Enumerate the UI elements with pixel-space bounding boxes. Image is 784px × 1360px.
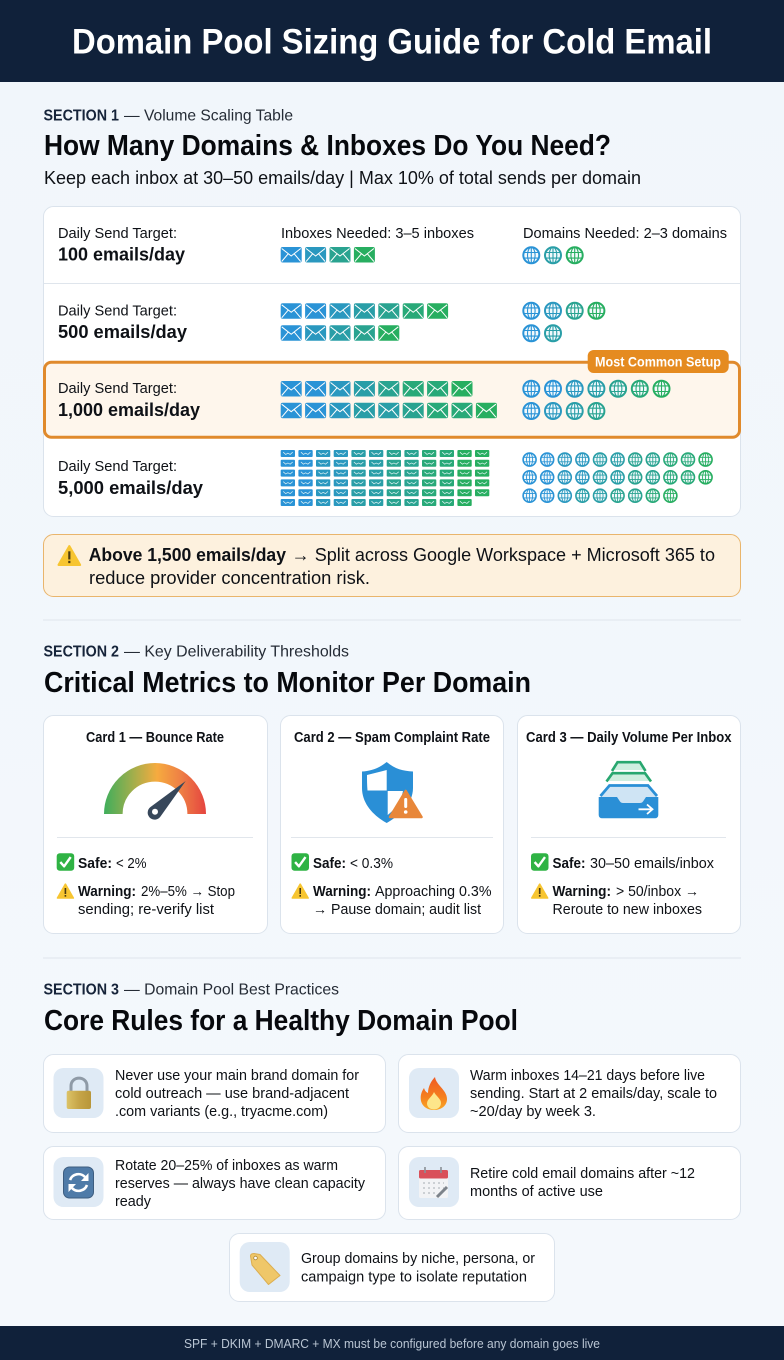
section 1 heading: How Many Domains & Inboxes Do You Need? — [44, 130, 611, 162]
section 1 heading: — Volume Scaling Table — [124, 108, 293, 124]
icon: tag — [250, 1254, 280, 1284]
panel: rule retire domains: Retire cold email domains after ~12 — [470, 1166, 695, 1182]
row: 500 emails/day: Daily Send Target: — [58, 304, 177, 320]
section 2 heading — [44, 644, 531, 699]
safe threshold: Safe: — [313, 856, 346, 872]
panel: rule retire domains: months of active use — [470, 1184, 603, 1200]
warning threshold: → Pause domain; audit list — [313, 902, 481, 918]
panel: rule warm inboxes: ~20/day by week 3. — [470, 1104, 596, 1120]
panel: rule rotate inboxes — [44, 1146, 386, 1220]
section 1 heading: SECTION 1 — [44, 108, 119, 124]
panel: rule rotate inboxes: reserves — always have clean capacity — [115, 1176, 366, 1192]
row: 5,000 emails/day: 5,000 emails/day — [58, 478, 203, 498]
panel: card 2 spam complaint rate: Card 2 — Spam Complaint Rate — [294, 730, 490, 746]
panel: card 1 bounce rate: Card 1 — Bounce Rate — [86, 730, 224, 746]
row: 1,000 emails/day highlighted: Daily Send Target: — [58, 381, 177, 397]
warning threshold: 2%–5% → Stop — [141, 884, 235, 900]
callout: split providers above 1,500 emails/day — [44, 534, 740, 596]
row: 5,000 emails/day — [58, 450, 712, 506]
icon: lock — [67, 1078, 91, 1109]
row: 100 emails/day: Inboxes Needed: 3–5 inboxes — [281, 226, 474, 242]
panel: rule main brand domain: .com variants (e.g., tryacme.com) — [115, 1104, 328, 1120]
row: 5,000 emails/day: Daily Send Target: — [58, 459, 177, 475]
section 1 heading: Keep each inbox at 30–50 emails/day | Max 10% of total sends per domain — [44, 168, 641, 188]
safe threshold — [292, 853, 393, 872]
panel: rule group domains — [230, 1234, 554, 1302]
warning threshold: Approaching 0.3% — [375, 884, 492, 900]
section 3 heading — [44, 982, 518, 1037]
icon: refresh — [64, 1167, 94, 1198]
section 3 heading: — Domain Pool Best Practices — [124, 982, 339, 998]
panel: rule warm inboxes: Warm inboxes 14–21 days before live — [470, 1068, 705, 1084]
panel: rule warm inboxes: sending. Start at 2 emails/day, scale to — [470, 1086, 717, 1102]
safe threshold: < 0.3% — [350, 856, 393, 872]
footer — [0, 1326, 784, 1360]
row: 500 emails/day — [58, 303, 604, 342]
warning threshold — [532, 884, 702, 918]
safe threshold: < 2% — [116, 856, 147, 872]
icon: calendar — [419, 1167, 448, 1198]
icon: shield with warning — [362, 762, 422, 823]
panel: rule rotate inboxes: ready — [115, 1194, 152, 1210]
panel: rule rotate inboxes: Rotate 20–25% of inboxes as warm — [115, 1158, 338, 1174]
warning threshold: sending; re-verify list — [78, 902, 214, 918]
row: 100 emails/day: 100 emails/day — [58, 244, 185, 264]
badge: most common setup: Most Common Setup — [595, 354, 721, 370]
warning threshold: Warning: — [313, 884, 371, 900]
icon: inbox tray stack — [599, 761, 658, 818]
callout: split providers above 1,500 emails/day: reduce provider concentration risk. — [89, 568, 370, 588]
warning threshold: > 50/inbox → — [616, 884, 699, 900]
warning threshold: Warning: — [78, 884, 136, 900]
warning threshold — [292, 884, 492, 918]
safe threshold — [57, 853, 147, 872]
safe threshold: Safe: — [78, 856, 112, 872]
row: 1,000 emails/day highlighted: 1,000 emails/day — [58, 400, 200, 420]
warning threshold — [58, 884, 235, 918]
safe threshold — [531, 853, 715, 872]
title: Domain Pool Sizing Guide for Cold Email — [72, 22, 712, 62]
panel: volume scaling table — [44, 206, 740, 516]
section 1 heading — [44, 108, 641, 188]
row: 100 emails/day: Domains Needed: 2–3 domains — [523, 226, 727, 242]
footer: SPF + DKIM + DMARC + MX must be configured before any domain goes live — [184, 1337, 600, 1351]
badge: most common setup — [588, 350, 729, 373]
row: 100 emails/day: Daily Send Target: — [58, 226, 177, 242]
panel: rule main brand domain: cold outreach — use brand-adjacent — [115, 1086, 349, 1102]
callout: split providers above 1,500 emails/day: → Split across Google Workspace + Microsoft 365 to — [292, 545, 715, 565]
row: 100 emails/day — [58, 226, 727, 264]
panel: card 3 daily volume per inbox — [518, 716, 740, 934]
panel: card 2 spam complaint rate — [280, 716, 504, 934]
panel: rule group domains: campaign type to isolate reputation — [301, 1270, 527, 1286]
row: 1,000 emails/day highlighted — [44, 350, 740, 437]
safe threshold: 30–50 emails/inbox — [590, 856, 715, 872]
warning threshold: Reroute to new inboxes — [552, 902, 702, 918]
panel: card 3 daily volume per inbox: Card 3 — Daily Volume Per Inbox — [526, 730, 732, 746]
panel: rule warm inboxes — [398, 1054, 740, 1132]
icon: warning — [59, 546, 80, 565]
safe threshold: Safe: — [552, 856, 586, 872]
panel: rule group domains: Group domains by niche, persona, or — [301, 1251, 535, 1267]
panel: rule main brand domain — [44, 1054, 386, 1132]
section 3 heading: SECTION 3 — [44, 982, 119, 998]
panel: rule retire domains — [398, 1146, 740, 1220]
panel: card 1 bounce rate — [44, 716, 268, 934]
section 3 heading: Core Rules for a Healthy Domain Pool — [44, 1005, 518, 1037]
icon: fire — [421, 1077, 447, 1110]
section 2 heading: SECTION 2 — [44, 644, 119, 660]
panel: rule main brand domain: Never use your main brand domain for — [115, 1068, 359, 1084]
warning threshold: Warning: — [552, 884, 611, 900]
header banner — [0, 0, 784, 82]
icon: gauge — [113, 772, 197, 820]
row: 500 emails/day: 500 emails/day — [58, 322, 187, 342]
callout: split providers above 1,500 emails/day: Above 1,500 emails/day — [89, 545, 286, 565]
section 2 heading: — Key Deliverability Thresholds — [124, 644, 349, 660]
section 2 heading: Critical Metrics to Monitor Per Domain — [44, 667, 531, 699]
